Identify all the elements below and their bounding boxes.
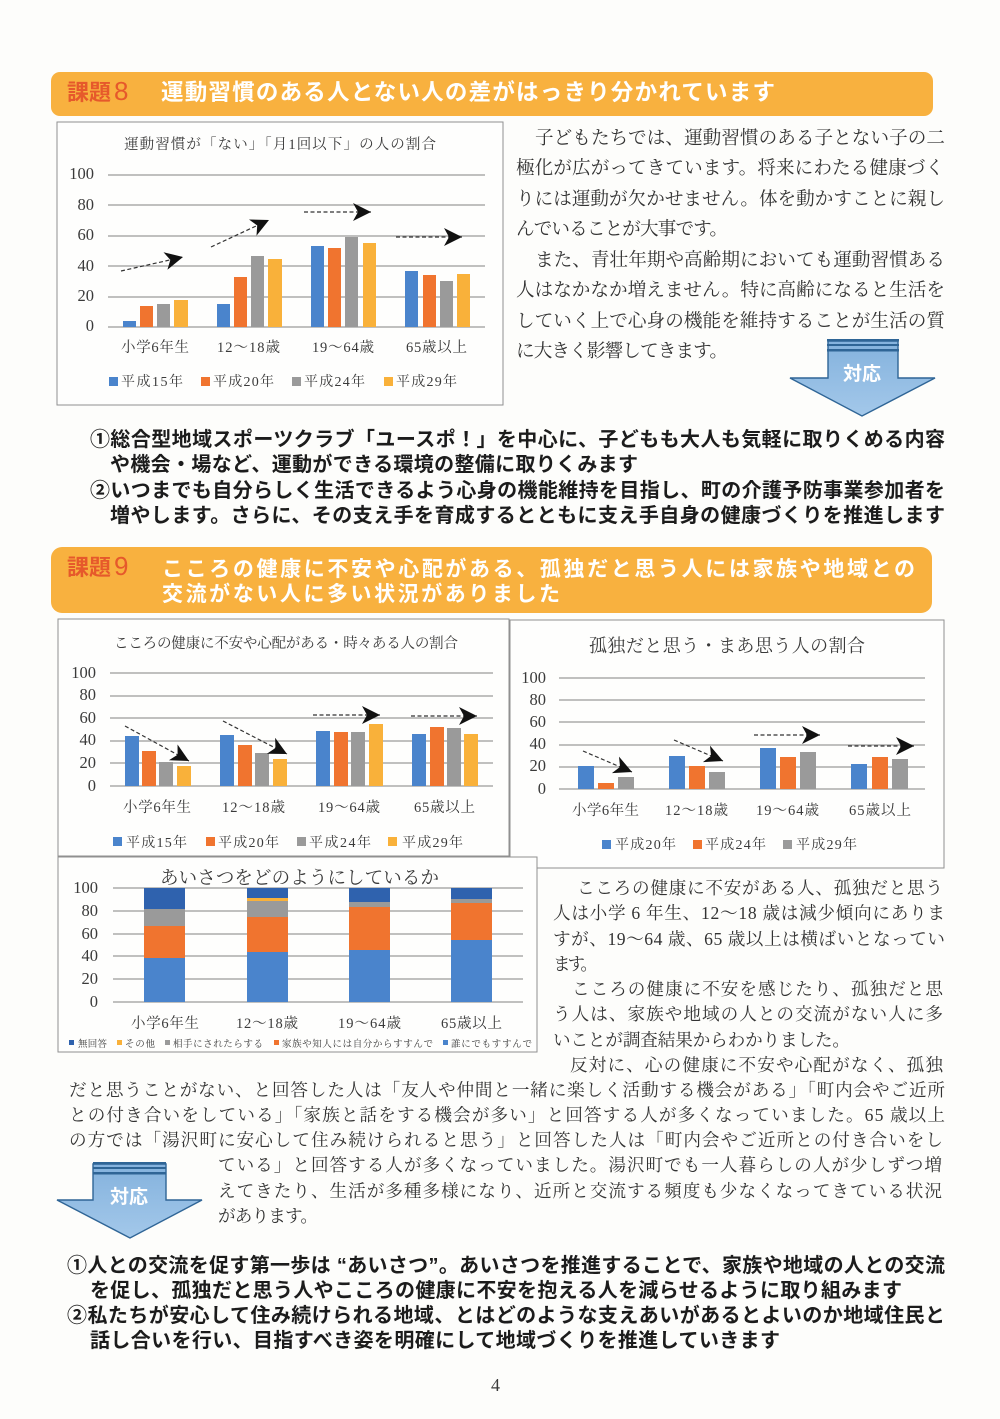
y axis labels: 0 (90, 992, 98, 1011)
bar chart: こころの健康 (58, 619, 509, 856)
y axis labels (69, 164, 94, 335)
chart title: 運動習慣が「ない」「月1回以下」の人の割合 (124, 135, 436, 153)
legend: 平成24年 (304, 373, 365, 390)
category labels (572, 801, 911, 819)
y axis labels: 40 (78, 256, 94, 275)
category labels: 小学6年生 (123, 798, 191, 816)
text block: 課題9 取り組み: ①人との交流を促す第一歩は “あいさつ”。あいさつを推進することで、家族や地域の人との交流 (67, 1254, 945, 1277)
category labels: 12～18歳 (217, 339, 280, 356)
y axis labels: 100 (71, 663, 96, 682)
text block: 課題9 取り組み: ②私たちが安心して住み続けられる地域、とはどのような支えあいがあるとよいのか地域住民と (67, 1303, 945, 1327)
text block: 課題8 本文: 子どもたちでは、運動習慣のある子とない子の二 (535, 128, 945, 149)
category labels: 12～18歳 (222, 799, 286, 816)
y axis labels: 80 (82, 901, 98, 920)
y axis labels: 60 (80, 708, 96, 727)
stacked bars (144, 888, 492, 1002)
legend: 平成15年 (126, 834, 187, 851)
legend: 平成24年 (705, 836, 766, 853)
text block: 課題9 本文: こころの健康に不安を感じたり、孤独だと思 (572, 979, 944, 999)
trend arrows (583, 735, 914, 772)
y axis labels: 20 (530, 756, 546, 775)
banner: 課題8 (51, 72, 933, 116)
legend: 平成29年 (402, 834, 463, 851)
y axis labels: 0 (86, 316, 94, 335)
arrow: 対応 (課題9) (57, 1162, 202, 1238)
arrow: 対応 (課題8) (790, 339, 935, 416)
y axis labels: 20 (82, 969, 98, 988)
legend: 平成29年 (796, 836, 857, 853)
stacked bar chart: あいさつ (58, 857, 537, 1052)
y axis labels (73, 878, 98, 1011)
trend arrows (125, 715, 477, 761)
arrow label: 対応 (110, 1186, 148, 1208)
banner label: 課題9: 課題9 (67, 551, 128, 581)
arrow label: 対応 (843, 363, 881, 385)
bars (123, 237, 470, 327)
text block: 課題8 本文: りには運動が欠かせません。体を動かすことに親し (516, 189, 945, 210)
legend: 無回答 (78, 1038, 107, 1050)
category labels: 19～64歳 (312, 339, 374, 356)
text block: 課題9 取り組み: を促し、孤独だと思う人やこころの健康に不安を抱える人を減らせるように取り組みます (90, 1278, 902, 1302)
text block: 課題8 本文 (516, 128, 946, 362)
legend: 平成20年 (213, 373, 274, 390)
chart title: こころの健康に不安や心配がある・時々ある人の割合 (114, 634, 458, 652)
legend (602, 836, 857, 853)
text block: 課題8 取り組み: や機会・場など、運動ができる環境の整備に取りくみます (110, 452, 638, 476)
legend: 平成24年 (309, 834, 371, 851)
text block: 課題9 本文: う人は、家族や地域の人との交流がない人に多 (553, 1004, 943, 1024)
text block: 課題8 本文: 人はなかなか増えません。特に高齢になると生活を (516, 280, 945, 301)
legend: 相手にされたらする (173, 1038, 263, 1050)
text block: 課題8 本文: 極化が広がってきています。将来にわたる健康づく (516, 158, 944, 179)
trend arrows (121, 212, 462, 271)
text block: 課題9 本文: との付き合いをしている」「家族と話をする機会が多い」と回答する人が多くなっていました。65 歳以上 (69, 1105, 945, 1125)
category labels: 19～64歳 (318, 799, 380, 816)
y axis labels: 20 (80, 753, 96, 772)
y axis labels: 60 (530, 712, 546, 731)
legend: 平成29年 (396, 373, 457, 390)
y axis labels: 0 (88, 776, 96, 795)
category labels (121, 338, 467, 356)
legend: 平成20年 (615, 836, 676, 853)
banner label: 課題8: 課題8 (67, 76, 128, 106)
category labels: 65歳以上 (414, 799, 475, 816)
banner heading: 運動習慣のある人とない人の差がはっきり分かれています (161, 79, 775, 105)
legend: 家族や知人には自分からすすんで (282, 1038, 433, 1050)
y axis labels: 0 (538, 779, 546, 798)
page number: 4 (491, 1375, 500, 1395)
y axis labels: 80 (78, 195, 94, 214)
category labels: 65歳以上 (849, 802, 911, 819)
text block: 課題9 本文 (69, 878, 945, 1226)
legend (109, 373, 457, 390)
banner: 課題9 (51, 547, 932, 613)
category labels: 65歳以上 (441, 1015, 502, 1032)
legend (69, 1038, 532, 1050)
text block: 課題9 本文: があります。 (218, 1206, 318, 1226)
text block: 課題9 本文: こころの健康に不安がある人、孤独だと思う (577, 878, 943, 898)
legend: 平成15年 (121, 373, 183, 390)
category labels: 65歳以上 (406, 339, 467, 356)
text block: 課題8 本文: に大きく影響してきます。 (516, 341, 728, 362)
text block: 課題9 本文: だと思うことがない、と回答した人は「友人や仲間と一緒に楽しく活動する機会がある」「町内会やご近所 (69, 1080, 945, 1100)
legend: 平成20年 (218, 834, 279, 851)
y axis labels: 40 (80, 730, 96, 749)
bar chart: 孤独 (510, 620, 944, 868)
y axis labels: 80 (530, 690, 546, 709)
category labels (123, 798, 475, 816)
text block: 課題8 取り組み: ①総合型地域スポーツクラブ「ユースポ！」を中心に、子どもも大人も気軽に取りくめる内容 (90, 427, 945, 451)
text block: 課題8 取り組み: 増やします。さらに、その支え手を育成するとともに支え手自身の健康づくりを推進します (110, 503, 945, 527)
bars (578, 748, 908, 789)
y axis labels: 80 (80, 685, 96, 704)
y axis labels: 40 (82, 946, 98, 965)
bars (125, 724, 478, 786)
y axis labels (521, 668, 546, 798)
text block: 課題9 取り組み (67, 1254, 945, 1352)
y axis labels: 40 (530, 734, 546, 753)
legend (113, 834, 463, 851)
legend: その他 (125, 1038, 155, 1050)
text block: 課題9 本文: えてきたり、生活が多種多様になり、近所と交流する頻度も少なくなってきている状況 (218, 1181, 942, 1201)
y axis labels: 20 (78, 286, 94, 305)
banner heading: こころの健康に不安や心配がある、孤独だと思う人には家族や地域との (162, 557, 915, 581)
category labels: 小学6年生 (572, 801, 639, 819)
category labels: 小学6年生 (121, 338, 189, 356)
category labels: 19～64歳 (756, 802, 820, 819)
text block: 課題8 本文: していく上で心身の機能を維持することが生活の質 (516, 311, 946, 332)
category labels: 12～18歳 (665, 802, 728, 819)
text block: 課題9 本文: ます。 (553, 954, 598, 974)
banner: 課題9: 交流がない人に多い状況がありました (162, 582, 560, 606)
category labels: 19～64歳 (338, 1015, 402, 1032)
y axis labels: 100 (521, 668, 546, 687)
y axis labels: 100 (69, 164, 94, 183)
category labels (131, 1014, 502, 1032)
text block: 課題9 本文: ている」と回答する人が多くなっていました。湯沢町でも一人暮らしの人が少しずつ増 (218, 1155, 942, 1175)
chart title: あいさつをどのようにしているか (160, 868, 439, 889)
text block: 課題9 本文: の方では「湯沢町に安心して住み続けられると思う」と回答した人は「町内会やご近所との付き合いをし (69, 1130, 943, 1150)
text block: 課題9 本文: 反対に、心の健康に不安や心配がなく、孤独 (570, 1055, 944, 1075)
text block: 課題8 取り組み: ②いつまでも自分らしく生活できるよう心身の機能維持を目指し、町の介護予防事業参加者を (90, 479, 945, 502)
y axis labels: 100 (73, 878, 98, 897)
chart title: 孤独だと思う・まあ思う人の割合 (589, 636, 865, 656)
text block: 課題9 本文: すが、19～64 歳、65 歳以上は横ばいとなってい (553, 929, 945, 949)
y axis labels (71, 663, 96, 795)
category labels: 小学6年生 (131, 1014, 199, 1032)
text block: 課題9 取り組み: 話し合いを行い、目指すべき姿を明確にして地域づくりを推進していきます (90, 1329, 780, 1352)
legend: 誰にでもすすんで (451, 1038, 532, 1050)
text block: 課題8 本文: また、青壮年期や高齢期においても運動習慣ある (535, 249, 945, 271)
text block: 課題8 本文: んでいることが大事です。 (516, 219, 728, 240)
text block: 課題8 取り組み (90, 427, 945, 527)
category labels: 12～18歳 (236, 1015, 298, 1032)
bar chart: 運動習慣 (57, 122, 503, 405)
y axis labels: 60 (82, 924, 98, 943)
y axis labels: 60 (78, 225, 94, 244)
text block: 課題9 本文: いことが調査結果からわかりました。 (553, 1030, 850, 1050)
text block: 課題9 本文: 人は小学 6 年生、12～18 歳は減少傾向にありま (553, 903, 945, 923)
